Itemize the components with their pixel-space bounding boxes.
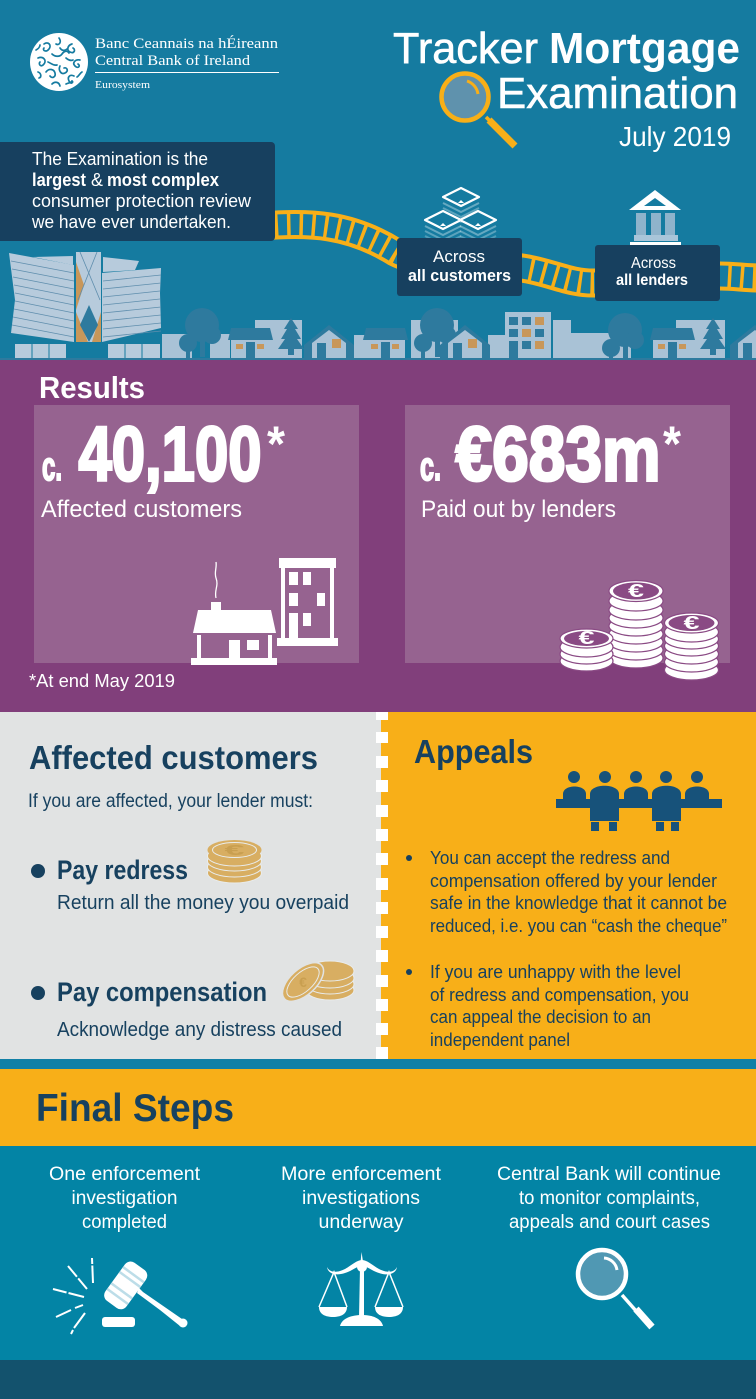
logo wordmark: Central Bank of Ireland — [95, 53, 251, 69]
title — [393, 24, 740, 152]
bullet: accept redress — [406, 848, 727, 936]
step: more investigations underway: underway — [318, 1212, 404, 1233]
card: affected customers: c. — [42, 445, 62, 489]
heading: results: Results — [39, 370, 145, 405]
bullet: appeal decision: If you are unhappy with the level — [430, 962, 681, 982]
step: continue to monitor: Central Bank will continue — [497, 1164, 721, 1185]
callout: largest and most complex — [0, 142, 275, 241]
footnote: *At end May 2019 — [29, 671, 175, 691]
bullet: appeal decision — [406, 962, 689, 1050]
card: paid out by lenders: €683m — [456, 412, 660, 498]
icon: scales of justice — [319, 1252, 403, 1326]
bullet: appeal decision: of redress and compensation, you — [430, 985, 689, 1005]
panel: results — [0, 360, 756, 712]
card: affected customers: 40,100 — [78, 412, 262, 498]
title: Mortgage — [549, 24, 740, 73]
panel: appeals — [381, 712, 756, 1059]
heading: affected customers: Affected customers — [29, 739, 318, 776]
panel: final steps — [0, 1146, 756, 1360]
step: continue to monitor — [497, 1164, 721, 1233]
footer band — [0, 1360, 756, 1399]
ribbon ladder path — [262, 224, 756, 283]
coin stack: tall — [609, 580, 663, 668]
logo wordmark — [95, 35, 279, 91]
coin stack: short — [560, 628, 613, 671]
card: paid out by lenders: c. — [420, 445, 441, 489]
card: affected customers — [34, 405, 359, 663]
panel: final steps heading bar: Final Steps — [36, 1087, 234, 1130]
callout: largest and most complex: most complex — [107, 170, 219, 190]
label: across all lenders: Across — [631, 255, 676, 272]
step: more investigations underway — [281, 1164, 442, 1233]
item: pay redress: Pay redress — [57, 855, 188, 885]
icon: gold coin stack — [208, 840, 262, 883]
card: paid out by lenders — [405, 405, 730, 663]
label: across all customers: all customers — [408, 267, 511, 285]
callout: largest and most complex: consumer protection review — [32, 191, 252, 211]
icon: euro coin stacks — [560, 580, 718, 680]
logo wordmark: Eurosystem — [95, 80, 150, 91]
illustration: Titanic-style building — [9, 252, 161, 360]
icon: gold coins with leaning coin: € — [299, 974, 307, 990]
icon: white magnifying glass — [578, 1250, 652, 1327]
bullet: accept redress: compensation offered by your lender — [430, 871, 717, 891]
band: divider stripe — [0, 1059, 756, 1069]
panel: final steps heading bar — [0, 1069, 756, 1146]
item: pay compensation: Acknowledge any distress caused — [57, 1019, 342, 1041]
perforated divider — [376, 712, 388, 1059]
icon: stacks of documents — [425, 188, 496, 245]
icon: gavel — [53, 1258, 188, 1334]
step: more investigations underway: investigations — [302, 1188, 420, 1209]
intro text: If you are affected, your lender must: — [28, 791, 313, 812]
step: continue to monitor: appeals and court cases — [509, 1212, 710, 1233]
title: Examination — [497, 69, 738, 118]
callout: largest and most complex: & — [91, 170, 103, 190]
card: affected customers: Affected customers — [41, 496, 242, 523]
bullet: accept redress: safe in the knowledge that it cannot be — [430, 893, 727, 913]
label: across all lenders: all lenders — [616, 272, 688, 289]
icon: house and apartment block — [191, 558, 338, 665]
bullet: accept redress: You can accept the redress and — [430, 848, 670, 868]
callout: largest and most complex: The Examination is the — [32, 149, 208, 169]
icon: gold coin stack: € — [224, 842, 246, 859]
icon: gold coins with leaning coin — [276, 956, 354, 1008]
coin stack: short: € — [578, 628, 594, 648]
coin stack: medium — [664, 613, 718, 680]
skyline apartment block — [505, 312, 551, 360]
title: Tracker — [393, 24, 538, 73]
heading: appeals: Appeals — [414, 733, 533, 770]
logo emblem — [30, 33, 88, 91]
card: paid out by lenders: * — [663, 416, 681, 472]
logo: Central Bank of Ireland — [30, 33, 279, 91]
step: continue to monitor: to monitor complaints, — [519, 1188, 700, 1209]
step: more investigations underway: More enforcement — [281, 1164, 442, 1185]
callout: largest and most complex: largest — [32, 170, 86, 190]
bullet: appeal decision: independent panel — [430, 1030, 570, 1050]
item: pay redress: Return all the money you overpaid — [57, 892, 349, 914]
bullet: accept redress: reduced, i.e. you can “cash the cheque” — [430, 916, 727, 936]
label: across all customers — [397, 238, 522, 296]
step: one investigation completed — [49, 1164, 201, 1233]
label: across all lenders — [595, 245, 720, 301]
item: pay redress — [31, 855, 349, 914]
coin stack: tall: € — [628, 581, 644, 601]
coin stack: medium: € — [684, 613, 700, 633]
panel: affected customers — [0, 712, 382, 1059]
step: one investigation completed: investigation — [72, 1188, 178, 1209]
step: one investigation completed: One enforcement — [49, 1164, 201, 1185]
icon: bank building — [629, 190, 681, 247]
illustration: houses and trees skyline — [0, 308, 756, 364]
logo wordmark: Banc Ceannais na hÉireann — [95, 35, 279, 52]
bullet: appeal decision: can appeal the decision to an — [430, 1007, 651, 1027]
header background — [0, 0, 756, 360]
card: affected customers: * — [267, 416, 285, 472]
icon: magnifying glass — [442, 74, 515, 146]
icon: appeals panel of people — [556, 771, 722, 831]
item: pay compensation: Pay compensation — [57, 977, 267, 1007]
title: July 2019 — [619, 121, 731, 152]
card: paid out by lenders: Paid out by lenders — [421, 496, 616, 523]
item: pay compensation — [31, 977, 342, 1041]
callout: largest and most complex: we have ever undertaken. — [31, 212, 231, 232]
label: across all customers: Across — [433, 247, 485, 266]
step: one investigation completed: completed — [82, 1212, 167, 1233]
